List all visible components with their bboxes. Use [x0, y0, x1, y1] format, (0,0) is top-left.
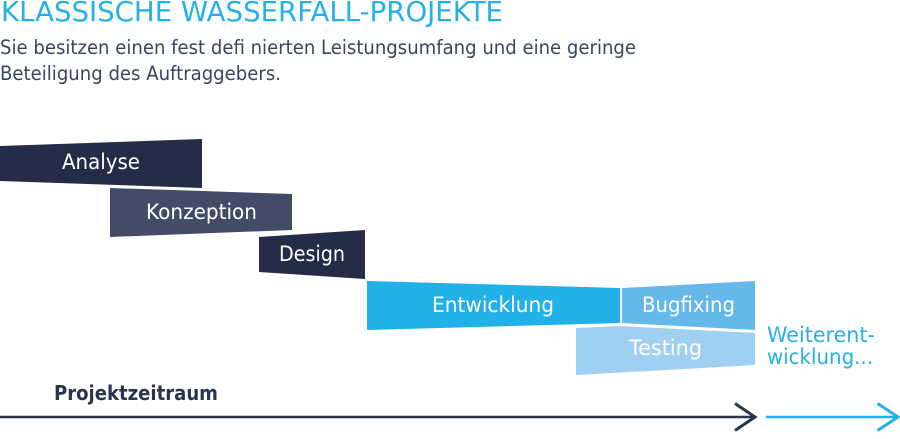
phase: Analyse: Analyse: [62, 150, 140, 175]
phase: Entwicklung: Entwicklung: [432, 293, 554, 318]
phase: Testing: Testing: [628, 336, 702, 361]
phase: Konzeption: Konzeption: [146, 200, 257, 225]
phase: Bugfixing: [622, 281, 755, 330]
phase: Testing: [576, 326, 755, 375]
phase: Entwicklung: [367, 281, 620, 330]
arrow: project timeline: [0, 404, 755, 430]
label: Weiterentwicklung: Weiterent-: [767, 323, 875, 348]
arrow: further development: [766, 404, 898, 430]
intro text: Beteiligung des Auftraggebers.: [0, 62, 281, 85]
intro text: [0, 36, 636, 85]
label: Projektzeitraum: Projektzeitraum: [54, 381, 218, 405]
phase: Bugfixing: Bugfixing: [642, 293, 735, 318]
label: Weiterentwicklung: wicklung...: [767, 345, 873, 370]
phase: Konzeption: [110, 188, 292, 237]
intro text: Sie besitzen einen fest defi nierten Leistungsumfang und eine geringe: [0, 36, 636, 59]
phase: Design: [259, 230, 365, 279]
phase: Analyse: [0, 139, 202, 188]
label: Weiterentwicklung: [767, 323, 875, 370]
phase: Design: Design: [279, 242, 345, 267]
